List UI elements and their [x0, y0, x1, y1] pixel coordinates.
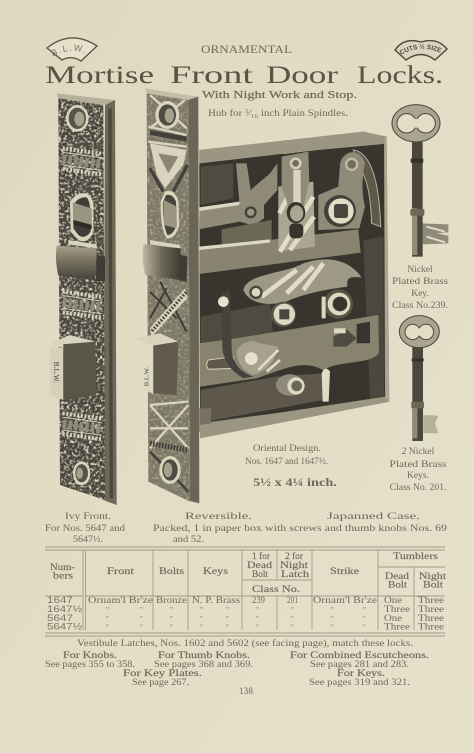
catalogue page: [45, 37, 448, 694]
icon: nickel key two: [399, 316, 439, 441]
table rows: N. P. Brass: [192, 595, 241, 605]
table header: Class No.: [252, 585, 300, 595]
table rows: One: [384, 613, 402, 623]
table rows: Three: [384, 604, 410, 614]
title: Locks.: [357, 60, 443, 89]
caption: ivy front: [45, 512, 125, 545]
footer references: For Keys.: [337, 669, 385, 679]
table header: 1 for: [252, 551, 271, 562]
title: Door: [266, 60, 339, 89]
caption: key one: Key.: [411, 289, 429, 299]
hub note: Hub for ⁵⁄₁₆ inch Plain Spindles.: [208, 108, 348, 119]
ditto marks: ": [363, 624, 366, 632]
tail lever: [318, 152, 365, 230]
lower hook lever: [199, 315, 379, 387]
ditto marks: ": [140, 615, 143, 623]
illustration: ivy front plate: B.L.W.: [52, 362, 61, 383]
table header: [50, 551, 446, 595]
illustration: oriental reversible front plate: [137, 88, 199, 503]
footer references: [45, 651, 429, 688]
ditto marks: ": [291, 624, 294, 632]
table header: 2 for: [285, 551, 304, 562]
table rows: 1647: [47, 595, 73, 605]
caption: key two: Class No. 201.: [390, 483, 446, 493]
ditto marks: ": [106, 624, 109, 632]
table rows: Three: [418, 622, 444, 632]
ditto marks: ": [256, 615, 259, 623]
ditto marks: ": [256, 606, 259, 614]
illustration: oriental reversible front plate: B.L.W.: [143, 367, 150, 386]
title: Front: [170, 60, 253, 89]
table header: Num-: [50, 563, 75, 573]
caption: ivy front: Ivy Front.: [65, 512, 111, 522]
caption: key one: Nickel: [407, 265, 433, 275]
ditto marks: ": [226, 615, 229, 623]
footer references: See pages 281 and 283.: [310, 660, 409, 670]
badge: cuts half size: [394, 40, 448, 61]
table rows: [47, 595, 444, 632]
ditto marks: ": [140, 606, 143, 614]
ditto marks: ": [331, 606, 334, 614]
specifications table: [45, 547, 446, 636]
table rows: 5647½: [47, 622, 83, 632]
footer references: For Thumb Knobs.: [158, 651, 250, 661]
caption: ivy front: For Nos. 5647 and: [45, 524, 125, 534]
table rows: Bronze: [156, 595, 187, 605]
table rows: 201: [287, 595, 298, 605]
ditto marks: ": [256, 624, 259, 632]
badge: B.L.W.: B.L.W.: [50, 44, 84, 56]
ditto marks: ": [291, 606, 294, 614]
caption: oriental design: [245, 444, 337, 489]
table header: Keys: [203, 567, 228, 577]
table header: Bolt: [388, 580, 407, 590]
badge: B.L.W.: [46, 37, 98, 62]
caption: oriental design: 5½ x 4¼ inch.: [253, 475, 337, 489]
ditto marks: ": [170, 615, 173, 623]
ditto marks: ": [170, 606, 173, 614]
page number: 138: [239, 686, 254, 696]
badge: cuts half size: CUTS ½ SIZE: [400, 44, 442, 54]
illustration: ivy front plate: [50, 93, 117, 505]
ditto marks: ": [226, 624, 229, 632]
table header: Bolt: [423, 580, 443, 590]
footer references: For Key Plates.: [123, 669, 202, 679]
lock case shell: [199, 132, 389, 438]
ditto marks: ": [170, 624, 173, 632]
ditto marks: ": [291, 615, 294, 623]
footer references: See pages 319 and 321.: [309, 678, 410, 688]
ditto marks: ": [106, 606, 109, 614]
caption: key one: [392, 265, 448, 311]
caption: ivy front: 5647½.: [73, 534, 103, 545]
table header: Bolts: [159, 567, 184, 577]
caption: reversible and packing: [153, 512, 447, 545]
illustration: open lock case: [199, 132, 389, 438]
wavy latch: [243, 259, 362, 304]
table rows: Three: [418, 613, 444, 623]
title: Mortise: [45, 60, 154, 89]
footer references: See pages 355 to 358.: [45, 660, 135, 670]
latch rings: [271, 302, 296, 327]
footer references: For Knobs.: [63, 651, 117, 661]
icon: nickel key one: [392, 105, 448, 257]
caption: reversible and packing: and 52.: [173, 535, 204, 545]
table rows: Ornam'l Br'ze: [88, 595, 153, 605]
caption: reversible and packing: Japanned Case.: [327, 512, 420, 522]
curved spring: [353, 150, 381, 227]
footer references: See page 267.: [132, 678, 189, 688]
caption: key two: Plated Brass: [390, 460, 447, 470]
table rows: Three: [384, 622, 410, 632]
centre plate with arm: [278, 182, 315, 252]
heading: ornamental: ORNAMENTAL: [201, 44, 292, 56]
caption: key one: Plated Brass: [392, 277, 448, 287]
table rows: One: [384, 595, 402, 605]
table header: Tumblers: [393, 552, 438, 562]
ditto marks: ": [331, 624, 334, 632]
table header: Strike: [330, 567, 359, 577]
table header: Dead: [247, 561, 272, 571]
footer note: Vestibule Latches, Nos. 1602 and 5602 (see facing page), match these locks.: [77, 638, 413, 649]
case rims: [199, 132, 387, 163]
table header: Bolt: [252, 570, 268, 580]
table rows: Three: [418, 604, 444, 614]
hub: [324, 195, 356, 227]
caption: oriental design: Oriental Design.: [253, 444, 321, 454]
table header: Night: [419, 572, 446, 582]
caption: key two: [390, 447, 447, 493]
ditto marks: ": [140, 624, 143, 632]
footer references: See pages 368 and 369.: [154, 660, 253, 670]
caption: key two: 2 Nickel: [402, 447, 435, 457]
ditto marks: ": [363, 615, 366, 623]
table rows: 5647: [47, 613, 73, 623]
lock case interior: [199, 143, 385, 423]
caption: key two: Keys.: [407, 471, 429, 481]
caption: reversible and packing: Packed, 1 in paper box with screws and thumb knobs Nos. 69: [153, 524, 447, 534]
table header: Dead: [385, 572, 409, 582]
table rows: 239: [252, 595, 265, 605]
title: [45, 60, 443, 89]
caption: oriental design: Nos. 1647 and 1647½.: [245, 456, 328, 467]
ditto marks: ": [200, 606, 203, 614]
ditto marks: ": [226, 606, 229, 614]
subtitle: With Night Work and Stop.: [202, 89, 357, 101]
table header: Front: [107, 567, 134, 577]
caption: key one: Class No.239.: [392, 301, 448, 311]
ditto marks: ": [331, 615, 334, 623]
ditto marks: ": [200, 624, 203, 632]
caption: reversible and packing: Reversible.: [185, 512, 252, 522]
table rows: 1647½: [47, 604, 83, 614]
table rows: Ornam'l Br'ze: [313, 595, 377, 605]
ditto marks: ": [363, 606, 366, 614]
table rows: Three: [418, 595, 444, 605]
footer references: For Combined Escutcheons.: [290, 651, 429, 661]
ditto marks: [106, 606, 366, 632]
main sliding bar: [199, 229, 361, 274]
table header: bers: [53, 572, 73, 582]
table header: Night: [280, 561, 308, 571]
ditto marks: ": [200, 615, 203, 623]
lower roller and spring pin: [276, 374, 304, 396]
ditto marks: ": [106, 615, 109, 623]
table header: Latch: [281, 570, 309, 580]
upper left lever: [199, 163, 277, 229]
